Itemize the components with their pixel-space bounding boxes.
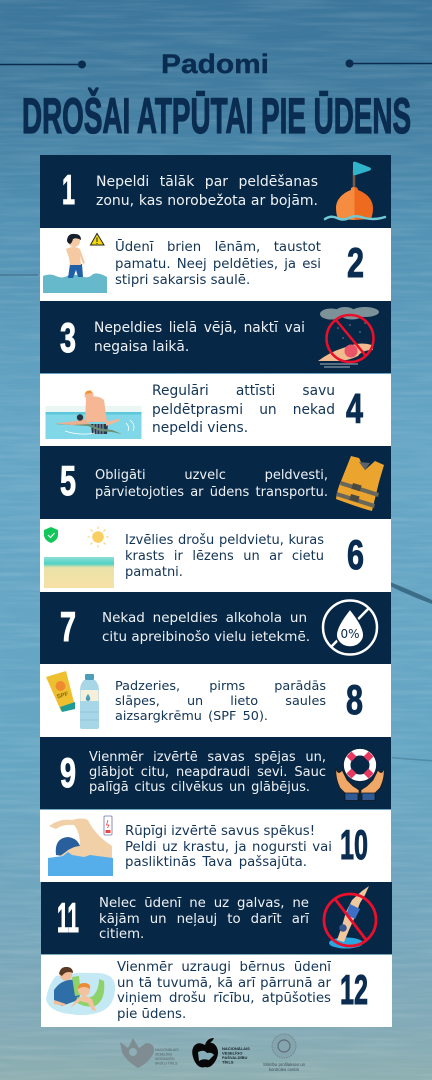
text: tip 12	[117, 960, 332, 1022]
logo: disease prevention and control centre: kontroles centrs	[269, 1067, 299, 1072]
text: tip 9: glābjot citu, neapdraudi sevi. Sauc	[89, 765, 326, 780]
text: tip 2: stipri sakarsis saulē.	[115, 273, 250, 288]
text: tip 3: negaisa laikā.	[94, 339, 189, 355]
logo: healthy municipalities network: TĪKLS	[222, 1060, 234, 1064]
text: tip 3	[94, 320, 305, 355]
text: tip 9	[89, 750, 326, 795]
heading: Padomi: Padomi	[161, 49, 269, 79]
text: tip 7: Nekad nepeldies alkohola un	[102, 610, 307, 626]
text: tip 6: krasts ir lēzens un ar cietu	[125, 548, 324, 564]
icon: buoy with flag	[324, 162, 386, 221]
text: tip 8: Padzeries, pirms parādās	[115, 679, 326, 694]
text: tip 12: un tā tuvumā, kā arī pārrunā ar	[117, 976, 331, 991]
logo: school health network: NACIONĀLAIS	[155, 1048, 179, 1052]
text: tip 5	[95, 468, 328, 500]
decorative right line with dot	[346, 60, 432, 68]
text: tip 11: citiem.	[99, 927, 144, 942]
text: tip 6	[125, 532, 324, 580]
text: tip 9: Vienmēr izvērtē savas spējas un,	[89, 750, 326, 765]
text: tip 8: slāpes, un lieto saules	[115, 694, 326, 709]
panel: tip 2	[40, 228, 391, 301]
icon: sunscreen and water bottle	[46, 671, 99, 729]
text: tip 5: Obligāti uzvelc peldvesti,	[95, 468, 328, 483]
logo: healthy municipalities network: NACIONĀLAIS	[222, 1046, 250, 1051]
text: tip 1: Nepeldi tālāk par peldēšanas	[96, 174, 318, 190]
text: tip 6: Izvēlies drošu peldvietu, kuras	[125, 532, 324, 548]
panel: tip 5	[40, 446, 391, 519]
text: tip 12: viņiem drošu rīcību, atpūšoties	[117, 991, 331, 1006]
decorative left line with dot	[0, 60, 86, 68]
panel: tip 7	[40, 592, 391, 664]
illustration: safe beach with sun and shield	[44, 526, 114, 588]
logo: school health network: VEICINOŠO	[155, 1056, 175, 1061]
text: tip 12: pie ūdens.	[117, 1007, 186, 1022]
logo: healthy municipalities network: PAŠVALDĪBU	[222, 1055, 248, 1060]
panel: tip 11	[41, 882, 392, 954]
text: tip 5: pārvietojoties ar ūdens transportu.	[95, 485, 328, 500]
panel: tip 1	[40, 155, 391, 228]
text: tip 4	[152, 383, 335, 436]
text: tip 12: Vienmēr uzraugi bērnus ūdenī	[117, 960, 331, 975]
text: tip 2: pamatu. Neej peldēties, ja esi	[115, 256, 321, 272]
text: tip 1	[96, 174, 318, 209]
illustration: lifeguard teaching a child to swim	[46, 390, 142, 439]
logo: healthy municipalities network	[190, 1036, 256, 1070]
text: tip 10: Rūpīgi izvērtē savus spēkus!	[125, 824, 315, 839]
icon: zero percent alcohol: 0%	[340, 627, 360, 641]
panel: tip 6	[40, 519, 391, 592]
logo: school health network	[118, 1035, 182, 1071]
text: tip 2: Ūdenī brien lēnām, taustot	[115, 240, 321, 255]
text: tip 1: zonu, kas norobežota ar bojām.	[96, 193, 318, 209]
text: tip 10: pasliktinās Tava pašsajūta.	[125, 855, 307, 870]
text: tip 8: aizsargkrēmu (SPF 50).	[115, 709, 268, 724]
logo: disease prevention and control centre: Slimību profilakses un	[263, 1062, 306, 1067]
panel: tip 8	[40, 664, 391, 737]
logo: disease prevention and control centre	[258, 1032, 310, 1074]
panel: tip 9	[40, 737, 391, 809]
text: tip 11: kājām un neļauj to darīt arī	[99, 912, 309, 926]
text: tip 10	[125, 824, 332, 870]
text: tip 9: palīgā citus cilvēkus un glābējus.	[89, 780, 310, 795]
text: tip 8	[115, 679, 326, 724]
logo: school health network: VESELĪBU	[155, 1052, 173, 1056]
text: tip 10: Peldi uz krastu, ja nogursti vai	[125, 840, 332, 854]
text: tip 4: peldētprasmi un nekad	[152, 402, 335, 418]
icon: no swimming in a storm	[318, 307, 379, 368]
panel: tip 12	[41, 955, 392, 1027]
panel: tip 10	[40, 810, 391, 882]
icon: tired swimmer with low battery	[48, 816, 113, 876]
icon: boy wading with warning sign	[43, 232, 107, 293]
icon: life jacket	[336, 456, 384, 511]
logo: school health network: SKOLU TĪKLS	[155, 1062, 178, 1066]
icon: hands holding a lifebuoy	[336, 748, 384, 801]
text: tip 6: pamatni.	[125, 564, 183, 580]
icon: sunscreen and water bottle: SPF	[56, 691, 69, 701]
icon: no diving	[322, 886, 378, 948]
text: tip 11: Nelec ūdenī ne uz galvas, ne	[99, 896, 309, 911]
illustration: parent and child in pool	[46, 967, 115, 1016]
text: tip 4: nepeldi viens.	[152, 420, 248, 436]
text: tip 11	[99, 896, 310, 942]
text: tip 7: citu apreibinošo vielu ietekmē.	[102, 629, 310, 645]
icon: zero percent alcohol	[322, 599, 378, 656]
text: tip 7	[102, 610, 310, 645]
text: tip 4: Regulāri attīsti savu	[152, 383, 335, 399]
logo: healthy municipalities network: VESELĪGO	[222, 1050, 242, 1056]
panel: tip 4	[40, 374, 391, 446]
text: tip 2	[115, 239, 321, 288]
panel: tip 3	[40, 301, 391, 373]
text: tip 3: Nepeldies lielā vējā, naktī vai	[94, 320, 305, 336]
